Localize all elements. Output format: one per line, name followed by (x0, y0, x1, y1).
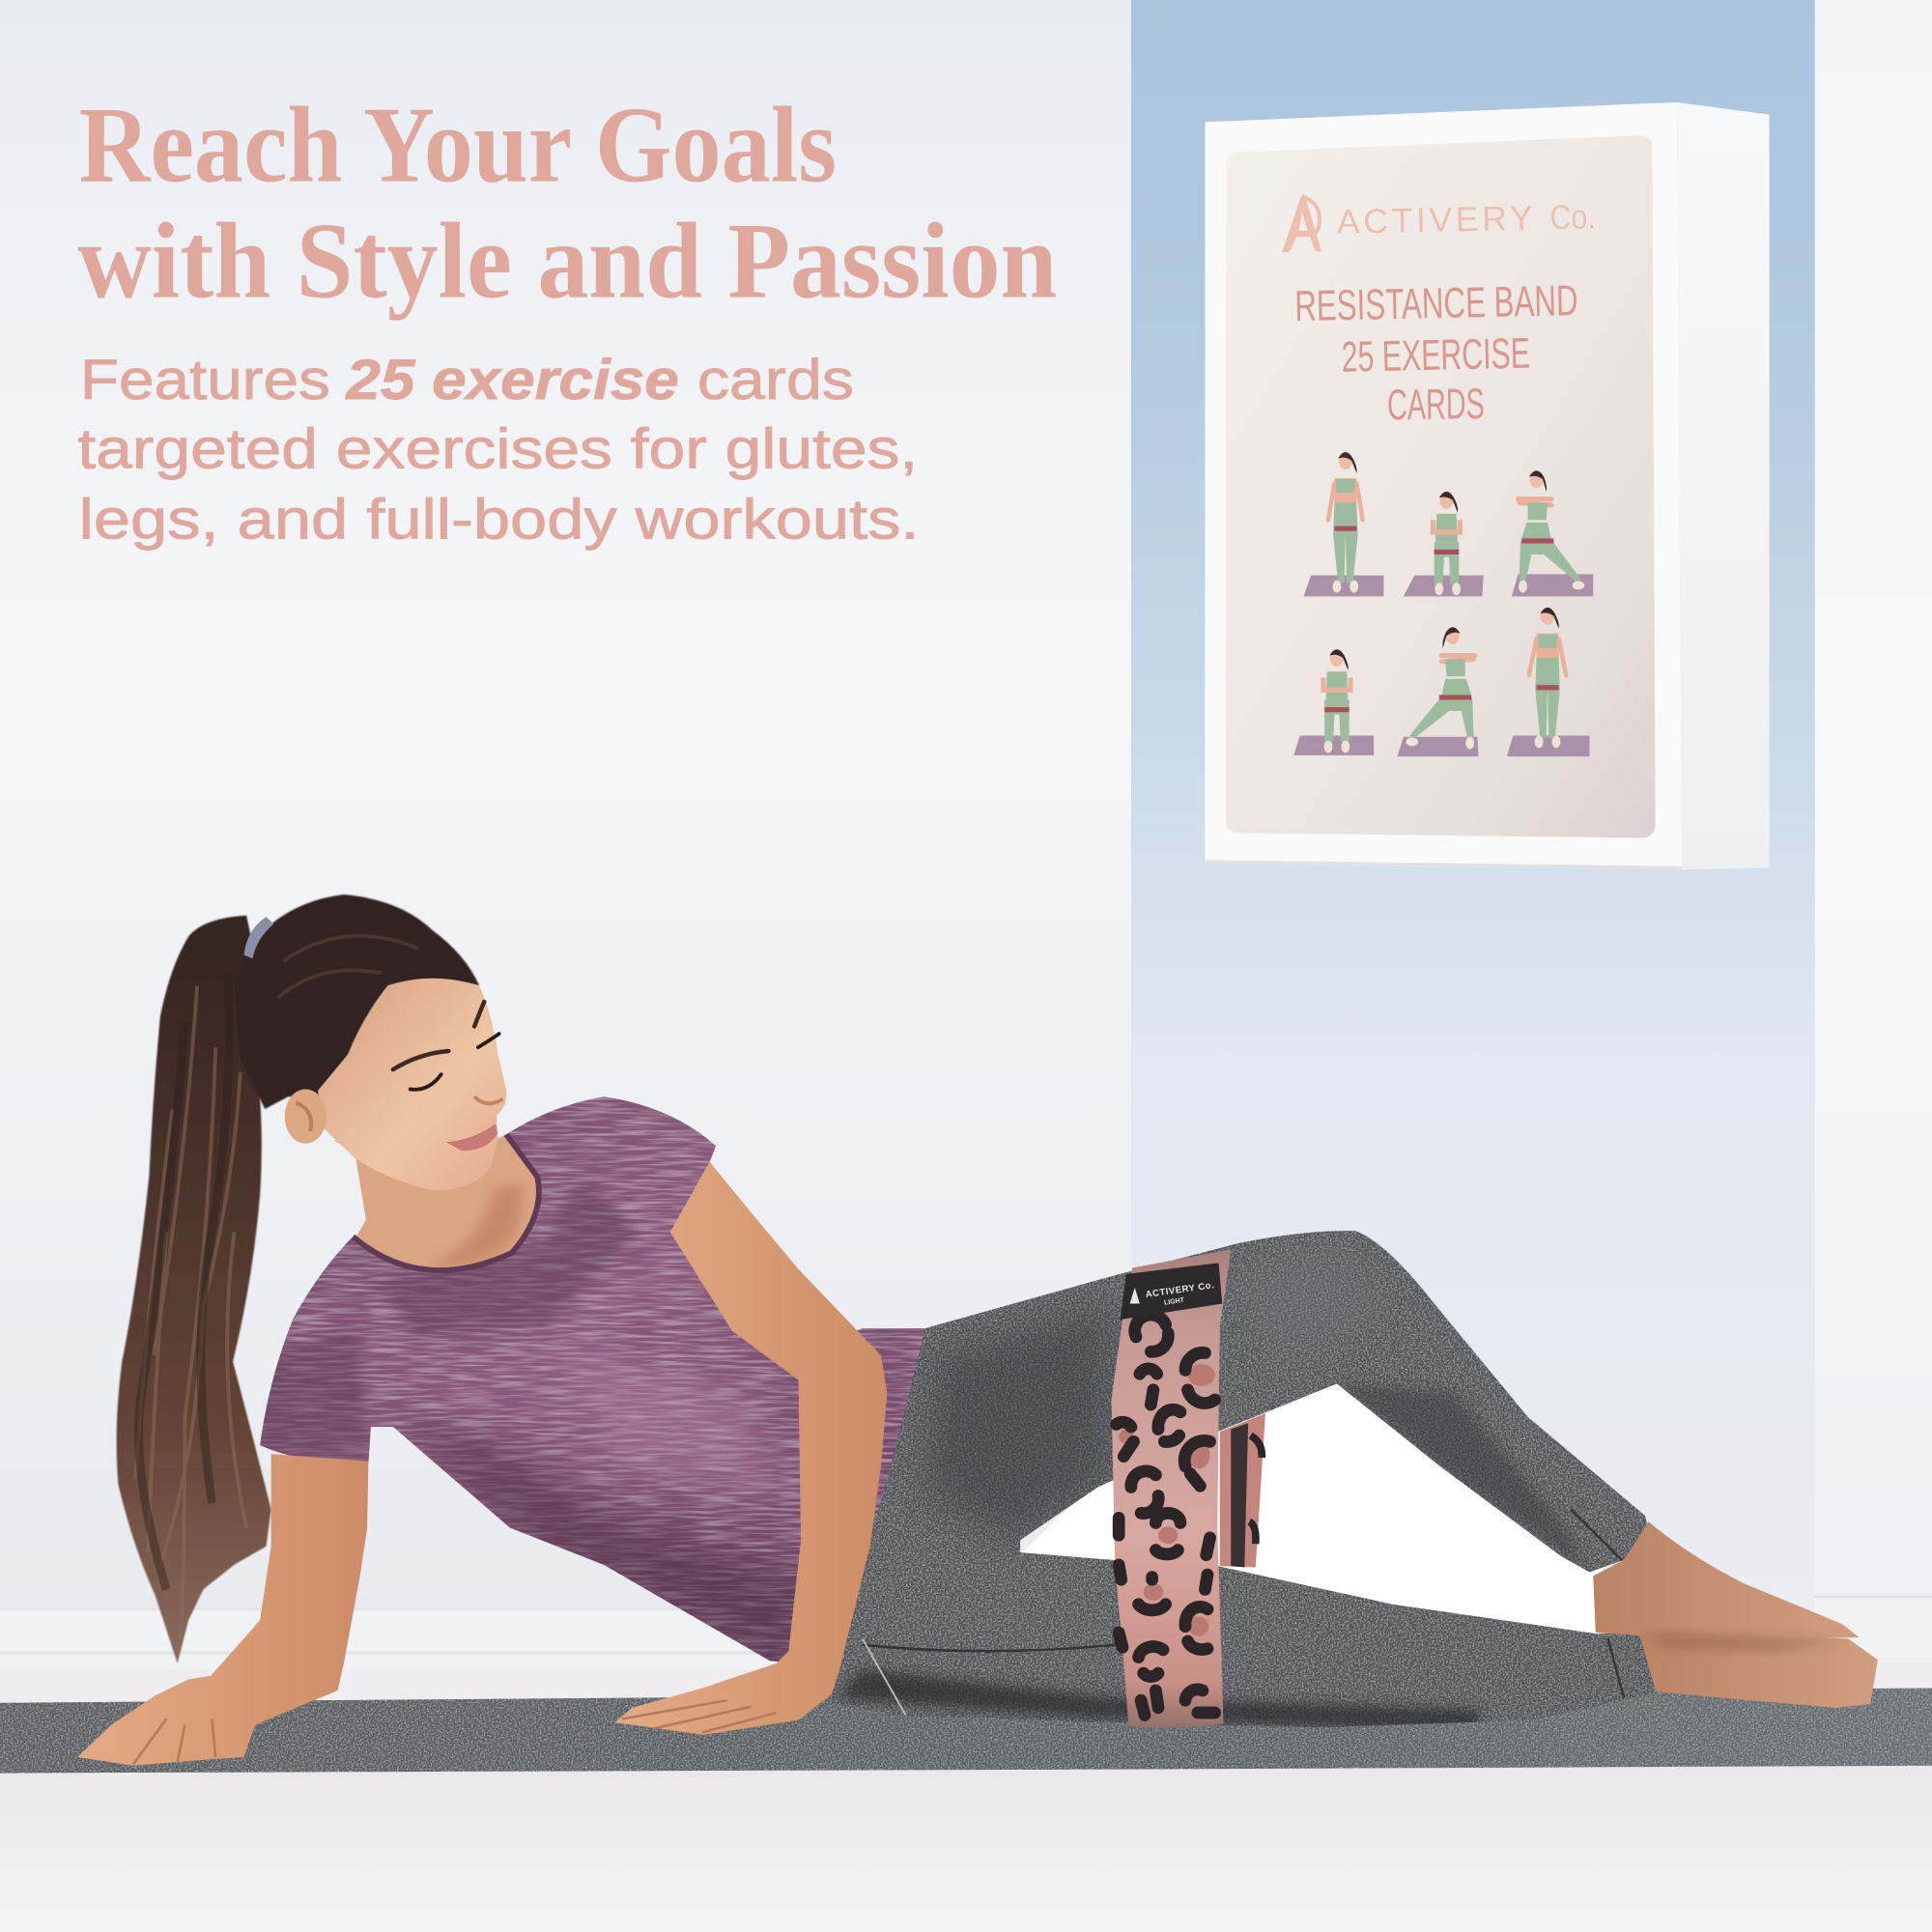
hand finger lines (622, 1700, 777, 1732)
bottom foot (1638, 1633, 1878, 1708)
foot shadow (1645, 1633, 1848, 1651)
brows (393, 1002, 484, 1069)
subtitle text block: 25 exercise (345, 349, 679, 412)
top foot (1593, 1521, 1860, 1638)
woman exercising with resistance band (77, 895, 1878, 1766)
shirt and torso (259, 1096, 926, 1676)
subtitle text block: cards (697, 349, 854, 412)
title: Reach Your Goals (79, 85, 837, 205)
yoga mat (0, 1688, 1932, 1773)
background wall: left (0, 0, 1131, 1725)
subtitle text block: Features (80, 349, 330, 412)
baseboard: left (0, 1608, 1131, 1719)
scrunchie (244, 917, 273, 958)
support hand finger lines (133, 1719, 215, 1765)
subtitle text block (77, 349, 920, 551)
back strand of band (1220, 1413, 1265, 1567)
box label heading: CARDS (1387, 381, 1485, 429)
title: with Style and Passion (77, 201, 1057, 321)
exercise figure 2: squat (1404, 492, 1484, 596)
front resistance band, leopard print (1112, 1249, 1231, 1727)
ponytail (117, 916, 271, 1663)
box logo: Activery Co.: ACTIVERY (1336, 199, 1533, 242)
nose shadow (474, 1096, 502, 1103)
band tag: ACTIVERY Co. (1145, 1280, 1214, 1300)
box label (1226, 135, 1656, 838)
floor (0, 1756, 1932, 1932)
face (318, 979, 506, 1190)
neck (332, 1133, 554, 1300)
hair dome (234, 895, 479, 1109)
ponytail strands (135, 985, 246, 1638)
support arm and hand (77, 1454, 368, 1766)
exercise figure 3: side lunge (1512, 470, 1593, 596)
front arm and hand (614, 1162, 887, 1735)
ear inner (296, 1103, 311, 1131)
product box: exercise cards (1205, 102, 1770, 870)
box label heading: RESISTANCE BAND (1294, 277, 1578, 330)
box label heading: 25 EXERCISE (1341, 330, 1530, 382)
subtitle text block: legs, and full-body workouts. (79, 488, 920, 551)
hair highlights (277, 936, 419, 998)
baseboard: right (1815, 1596, 1932, 1707)
ear (285, 1090, 327, 1144)
exercise figure 4: squat (1293, 649, 1374, 755)
background wall: right (1815, 0, 1932, 1725)
ponytail dark strands (138, 974, 229, 1589)
box front face (1205, 102, 1682, 870)
subtitle text block: targeted exercises for glutes, (77, 418, 918, 481)
leggings (828, 1231, 1660, 1731)
band tag (1120, 1263, 1222, 1320)
title (77, 85, 1057, 321)
box logo: Activery Co.: Co. (1549, 197, 1596, 237)
lips (446, 1123, 497, 1151)
leopard spots (1117, 1315, 1215, 1716)
band tag: LIGHT (1164, 1297, 1185, 1307)
exercise figure 1: standing (1303, 452, 1383, 596)
exercise figure 5: side lunge (1397, 627, 1479, 756)
box label heading (1294, 277, 1578, 429)
leopard spot centres (1119, 1364, 1215, 1636)
background panel: blue column (1131, 0, 1815, 1725)
gap between legs (1020, 1368, 1602, 1641)
eyes (411, 1034, 499, 1090)
box side face (1677, 102, 1770, 870)
box logo: Activery Co. (1281, 190, 1596, 252)
neck shadow (425, 1182, 524, 1269)
exercise figure 6: standing (1507, 608, 1589, 756)
